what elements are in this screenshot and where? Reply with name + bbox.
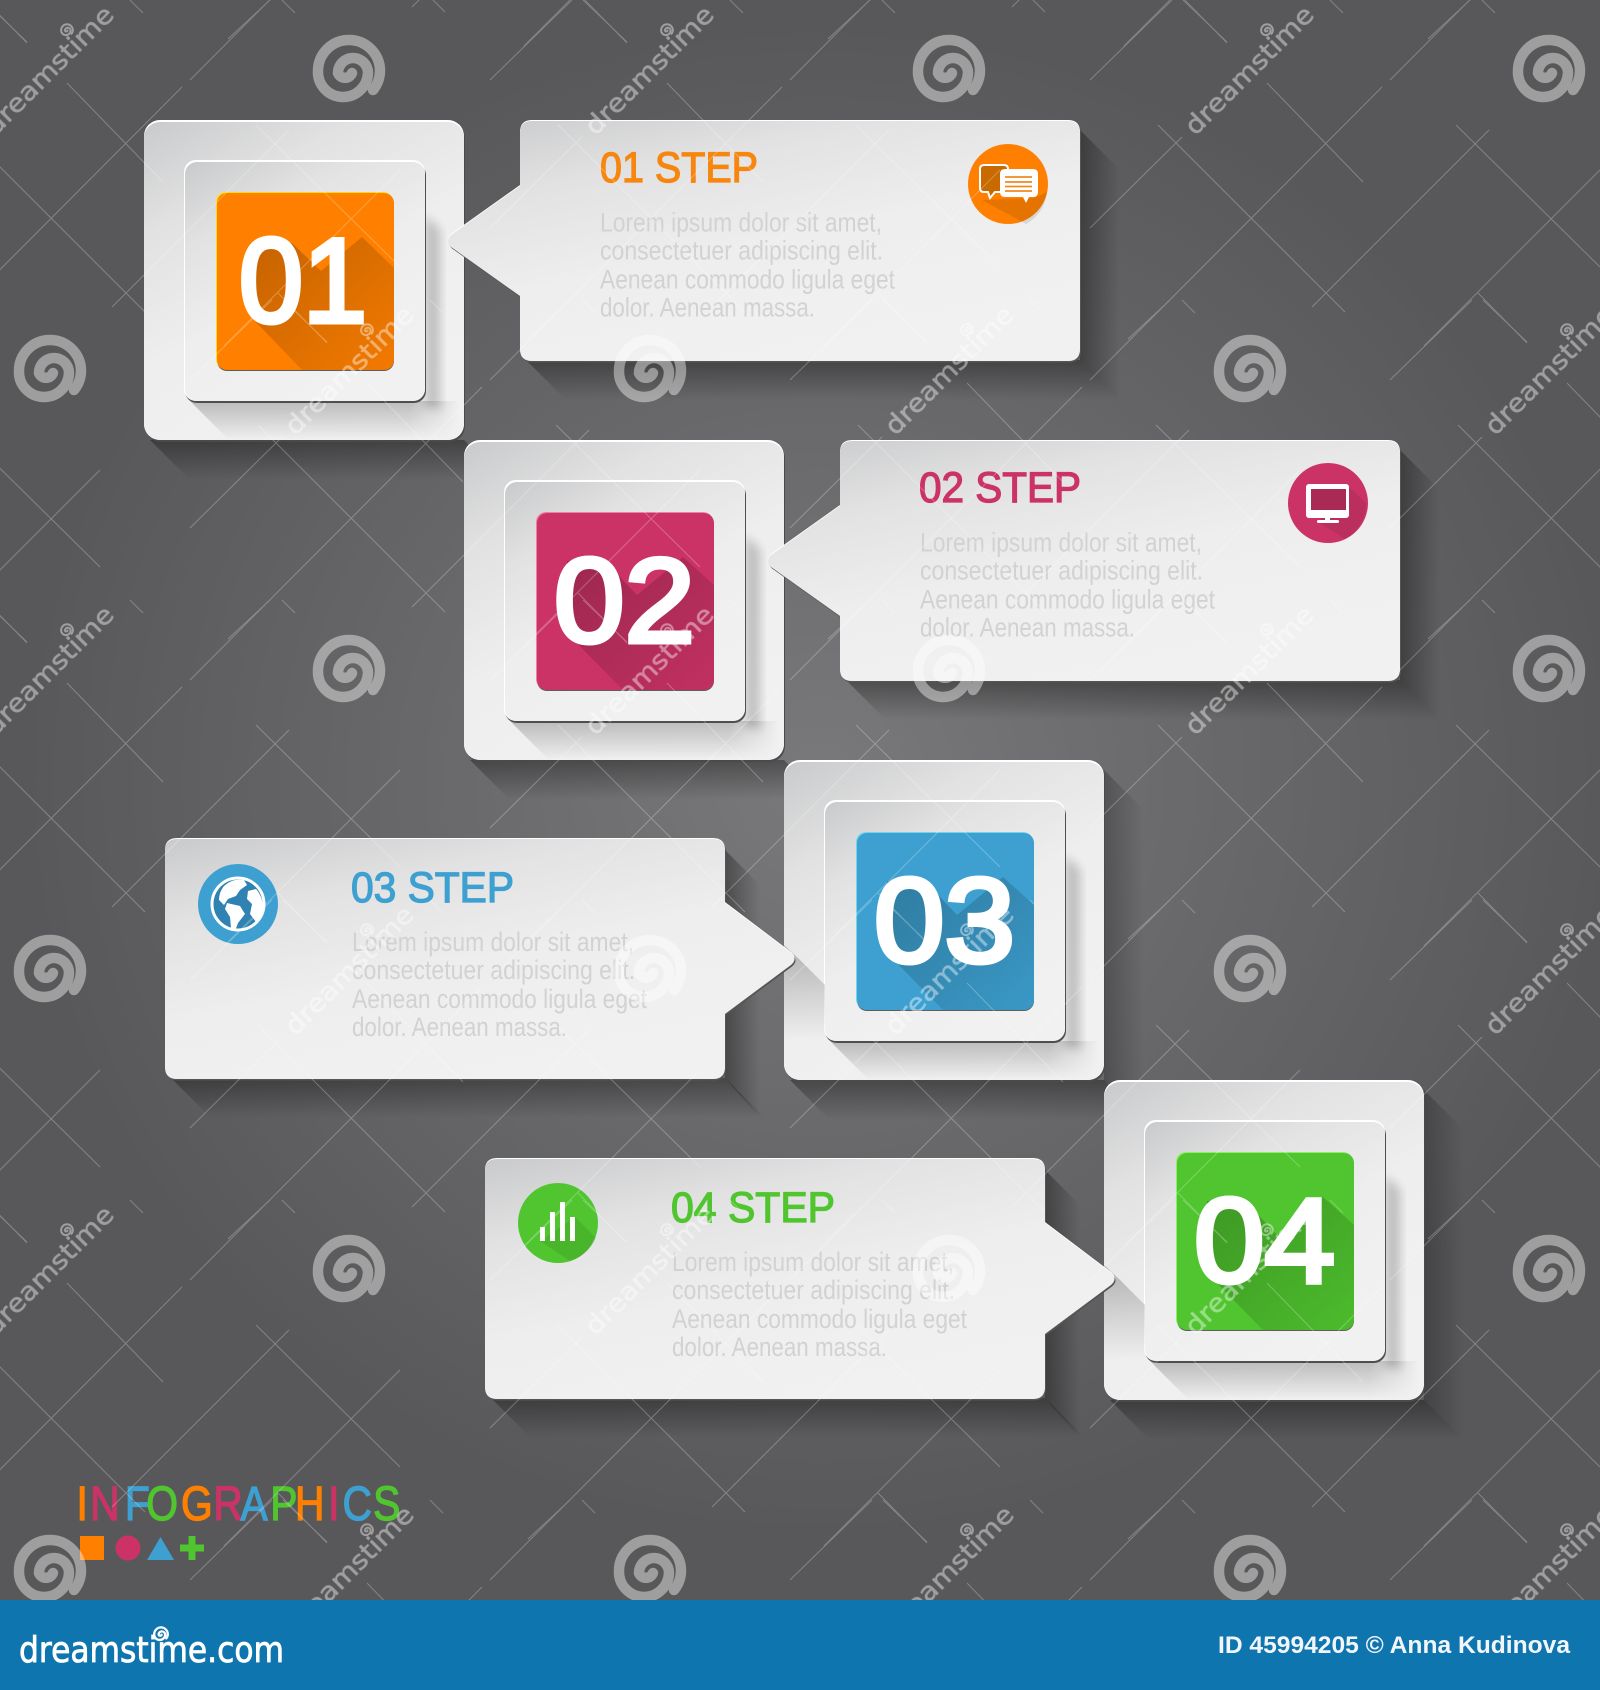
watermark text: dreamstime <box>579 0 720 141</box>
watermark text: dreamstime <box>1179 600 1320 741</box>
step 2 body text: consectetuer adipiscing elit. <box>920 556 1203 586</box>
icons: shape legend <box>80 1536 204 1560</box>
icon: globe <box>198 864 278 944</box>
step 3 body text: Lorem ipsum dolor sit amet, <box>352 927 634 957</box>
icon: chat bubbles <box>968 144 1048 224</box>
infographics wordmark: G <box>181 1478 213 1531</box>
step 1 body text: consectetuer adipiscing elit. <box>600 236 883 266</box>
footer bar <box>0 1600 1600 1690</box>
step 1 body text: dolor. Aenean massa. <box>600 292 815 322</box>
step 3 heading: 03 STEP <box>351 864 514 912</box>
icon: monitor <box>1288 463 1368 543</box>
step 1 callout panel <box>448 120 1081 362</box>
step 1 body text: Aenean commodo ligula eget <box>600 264 895 294</box>
step 1 heading: 01 STEP <box>600 144 758 192</box>
step 3 body text: consectetuer adipiscing elit. <box>352 955 635 985</box>
step 3 number card <box>784 760 1105 1082</box>
watermark text: dreamstime <box>879 900 1020 1041</box>
step 2 number card <box>464 440 785 762</box>
step 2 number card: 02 <box>554 534 695 668</box>
step 4 number card: 04 <box>1194 1174 1335 1308</box>
step 3 body text: Aenean commodo ligula eget <box>352 984 647 1014</box>
footer logo spiral <box>154 1627 168 1640</box>
step 2 body text: Lorem ipsum dolor sit amet, <box>920 528 1202 558</box>
step 2 heading: 02 STEP <box>919 464 1081 512</box>
infographics wordmark: P <box>270 1478 298 1531</box>
step 3 number card: 03 <box>874 854 1015 988</box>
step 4 callout panel <box>485 1158 1116 1400</box>
step 3 body text: dolor. Aenean massa. <box>352 1012 567 1042</box>
watermark text: dreamstime <box>879 1500 1020 1641</box>
infographics wordmark: A <box>241 1478 268 1531</box>
arrow shadows on number cards <box>784 945 1145 1360</box>
step 4 body text: Aenean commodo ligula eget <box>672 1304 967 1334</box>
infographics wordmark: N <box>90 1478 120 1531</box>
icon: bar chart <box>518 1183 598 1263</box>
long shadows on background <box>150 130 1464 1440</box>
step 4 body text: Lorem ipsum dolor sit amet, <box>672 1247 954 1277</box>
footer logo text: dreamstime.com <box>19 1630 284 1671</box>
step 2 body text: dolor. Aenean massa. <box>920 612 1135 642</box>
infographics wordmark: R <box>213 1478 243 1531</box>
watermark text: dreamstime <box>879 300 1020 441</box>
step 1 number card: 01 <box>239 214 367 348</box>
watermark text: dreamstime <box>1179 0 1320 141</box>
step 2 callout panel <box>768 440 1401 682</box>
step 4 number card <box>1104 1080 1425 1402</box>
infographics wordmark: I <box>328 1478 339 1531</box>
watermark text: dreamstime <box>1179 1200 1320 1341</box>
footer credit: ID 45994205 © Anna Kudinova <box>1218 1632 1571 1659</box>
infographics wordmark: H <box>295 1478 324 1531</box>
infographics wordmark: C <box>343 1478 372 1531</box>
step 3 callout panel <box>165 838 796 1080</box>
watermark text: dreamstime <box>279 300 420 441</box>
step 4 body text: dolor. Aenean massa. <box>672 1332 887 1362</box>
infographics wordmark: F <box>125 1478 150 1531</box>
step 4 body text: consectetuer adipiscing elit. <box>672 1275 955 1305</box>
watermark text: dreamstime <box>579 600 720 741</box>
step 1 body text: Lorem ipsum dolor sit amet, <box>600 208 882 238</box>
infographics wordmark: I <box>77 1478 88 1531</box>
watermark text: dreamstime <box>279 900 420 1041</box>
watermark text: dreamstime <box>279 1500 420 1641</box>
step 4 heading: 04 STEP <box>671 1184 835 1232</box>
watermark text: dreamstime <box>579 1200 720 1341</box>
step 2 body text: Aenean commodo ligula eget <box>920 584 1215 614</box>
infographics wordmark: S <box>373 1478 400 1531</box>
infographics wordmark: O <box>146 1478 178 1531</box>
step 1 number card <box>144 120 465 442</box>
